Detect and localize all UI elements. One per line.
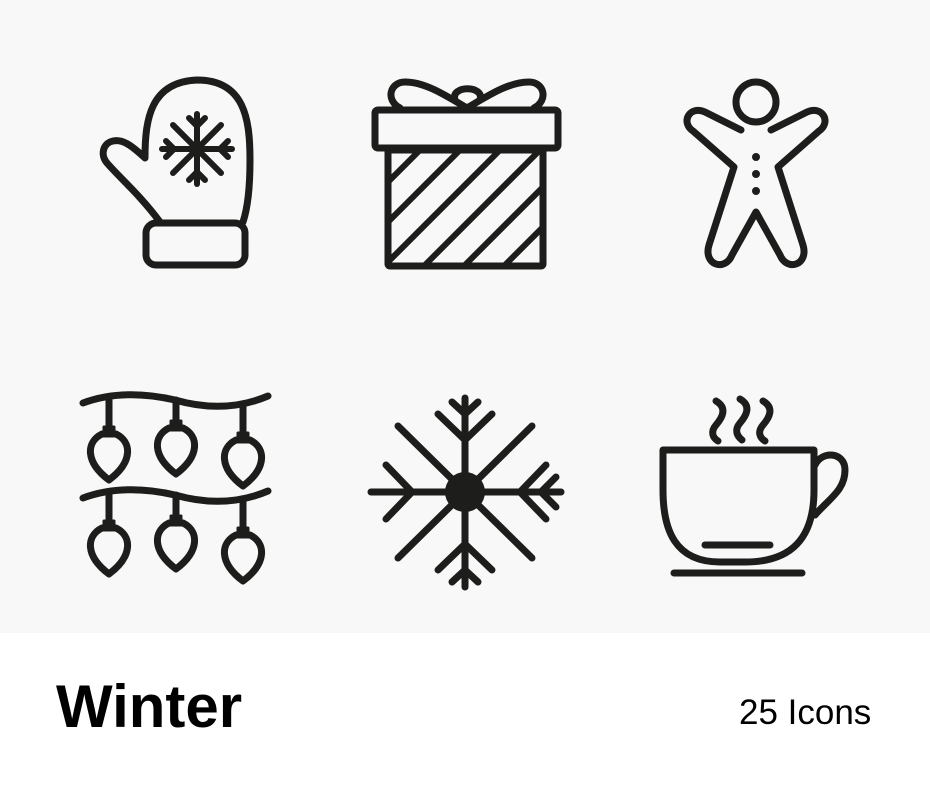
icon: coffee cup xyxy=(663,399,845,573)
icon: gingerbread man xyxy=(687,82,825,265)
icon: gift xyxy=(372,78,562,270)
icon: snowflake xyxy=(371,398,561,587)
icon: string lights xyxy=(83,395,268,581)
icon: mitten xyxy=(103,80,250,265)
title: Winter xyxy=(56,673,242,740)
icon count: 25 Icons xyxy=(739,693,871,732)
